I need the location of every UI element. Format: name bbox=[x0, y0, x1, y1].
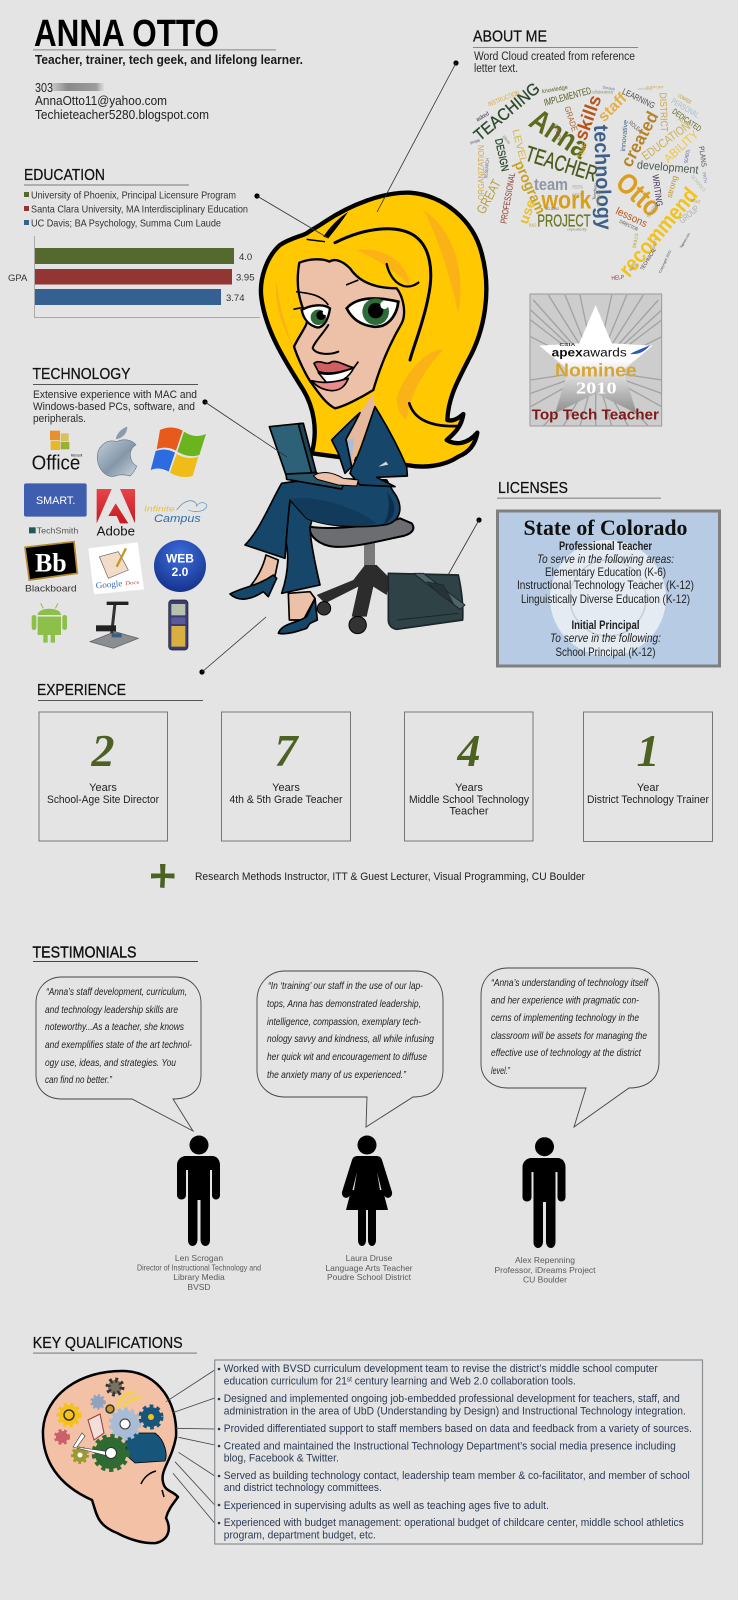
word cloud: PLANS bbox=[697, 146, 709, 168]
key qualifications heading: KEY QUALIFICATIONS bbox=[33, 1335, 183, 1352]
testimonials heading: TESTIMONIALS bbox=[32, 944, 136, 962]
experience card: 2 years: School-Age Site Director bbox=[47, 794, 159, 806]
qualification items: Experienced in supervising adults as well as teaching ages five to adult. bbox=[224, 1500, 549, 1512]
icon: blackboard: Blackboard bbox=[25, 584, 77, 594]
person icon: man bbox=[177, 1136, 220, 1246]
word cloud: TEACHER bbox=[523, 141, 601, 186]
quote 1: “Anna’s staff development, curriculum, bbox=[46, 986, 187, 998]
license card: Initial Principal bbox=[572, 618, 640, 632]
word cloud: ORGANIZATION bbox=[476, 145, 486, 200]
word cloud: people bbox=[470, 137, 481, 145]
word cloud: ALLY bbox=[676, 117, 692, 129]
word cloud: SCHOOL bbox=[683, 149, 692, 164]
education legend: University of Phoenix, Principal Licensure Program bbox=[31, 190, 236, 202]
experience card: 2 years: 2 bbox=[90, 725, 114, 776]
word cloud: repeatedly bbox=[567, 227, 587, 232]
quote 3: and her experience with pragmatic con- bbox=[491, 994, 639, 1006]
word cloud: Standards bbox=[602, 84, 615, 92]
word cloud: LEARNING bbox=[621, 86, 657, 111]
qualification items: program, department budget, etc. bbox=[224, 1530, 376, 1542]
speech bubble 3 bbox=[481, 968, 659, 1127]
panel: about me bbox=[470, 28, 709, 282]
qualification items: Worked with BVSD curriculum development team to revise the district’s middle school computer bbox=[224, 1363, 658, 1375]
face bbox=[294, 259, 404, 408]
icon: office: Microsoft bbox=[71, 454, 82, 458]
icon: techsmith: TechSmith bbox=[37, 526, 79, 536]
education legend: UC Davis; BA Psychology, Summa Cum Laude bbox=[31, 218, 221, 230]
word cloud: SCHOOLS bbox=[689, 174, 707, 194]
word cloud: DESIGN bbox=[492, 137, 511, 173]
word cloud: skills bbox=[570, 92, 605, 143]
word cloud: GRADE bbox=[562, 105, 580, 133]
icon: apple bbox=[97, 427, 137, 476]
qualification items: education curriculum for 21 bbox=[224, 1376, 356, 1388]
word cloud: team bbox=[534, 175, 568, 194]
word cloud: DISTRICT bbox=[657, 92, 669, 132]
word cloud: Teaching bbox=[592, 182, 598, 200]
icon: web 2.0 bbox=[154, 540, 206, 592]
quote 3: level.” bbox=[491, 1065, 510, 1077]
caption: Len Scrogan: BVSD bbox=[187, 1282, 211, 1292]
qualification items: Designed and implemented ongoing job-embedded professional development for teachers, staff, and bbox=[224, 1393, 680, 1405]
word cloud: PROJECT bbox=[537, 211, 591, 231]
word cloud: ROLE bbox=[627, 120, 640, 133]
connector line: about me bbox=[377, 60, 459, 212]
experience card: 7 years: 4th & 5th Grade Teacher bbox=[230, 794, 343, 806]
testimonial 3 bbox=[481, 968, 659, 1284]
word cloud: LEVEL bbox=[509, 128, 529, 165]
bar chart: GPA bbox=[8, 236, 260, 318]
caption: Alex Repenning: CU Boulder bbox=[523, 1274, 567, 1284]
qualification items: and district technology committees. bbox=[224, 1482, 382, 1494]
experience card: 7 years: 7 bbox=[274, 725, 300, 776]
qualification items: Served as building technology contact, leadership team member & co-facilitator, and member of school bbox=[224, 1470, 690, 1482]
license card: To serve in the following areas: bbox=[537, 552, 674, 566]
license card: Linguistically Diverse Education (K-12) bbox=[521, 592, 690, 606]
speech bubble 1 bbox=[36, 977, 201, 1131]
testimonial 2 bbox=[257, 971, 443, 1282]
qualification bullets bbox=[218, 1368, 220, 1524]
panel: about me: letter text. bbox=[474, 63, 518, 75]
word cloud: development bbox=[636, 158, 700, 177]
experience card: 2 years bbox=[39, 712, 168, 841]
character: cartoon teacher with laptop bbox=[230, 193, 486, 634]
qualification items: Provided differentiated support to staff members based on data and feedback from a variety of sources. bbox=[224, 1423, 692, 1435]
word cloud: SKILLS bbox=[632, 233, 639, 249]
word cloud: EDUCATION bbox=[639, 119, 693, 163]
quote 3: effective use of technology at the district bbox=[491, 1047, 642, 1059]
connector line: experience bbox=[199, 617, 266, 675]
eyes bbox=[293, 280, 398, 327]
caption: Laura Druse bbox=[325, 1253, 413, 1282]
word cloud: knowledge bbox=[542, 85, 569, 95]
word cloud: INSTRUCTION bbox=[487, 89, 521, 109]
icon: blackboard: Bb bbox=[35, 548, 67, 578]
icon: android bbox=[32, 603, 67, 643]
testimonial 1 bbox=[36, 977, 261, 1292]
caption: Len Scrogan: Library Media bbox=[173, 1272, 225, 1282]
technology logos bbox=[24, 427, 207, 650]
icon: office bbox=[32, 431, 82, 474]
quote 2: tops, Anna has demonstrated leadership, bbox=[267, 998, 421, 1010]
word cloud: use bbox=[515, 197, 539, 226]
contact details: AnnaOtto11@yahoo.com bbox=[35, 93, 167, 108]
caption: Alex Repenning: Alex Repenning bbox=[515, 1255, 575, 1265]
word cloud: innovative bbox=[620, 119, 630, 152]
quote 2 bbox=[267, 980, 434, 1081]
additional experience text: Research Methods Instructor, ITT & Guest Lecturer, Visual Programming, CU Boulder bbox=[195, 871, 585, 883]
word cloud: work bbox=[540, 186, 592, 214]
quote 2: nology savvy and kindness, all while infusing bbox=[267, 1033, 434, 1045]
experience card: 4 years: Middle School Technology bbox=[409, 794, 529, 806]
quote 1: ogy use, ideas, and strategies. You bbox=[45, 1057, 176, 1069]
word cloud: IMPLEMENTED bbox=[543, 86, 592, 109]
qualification items: century learning and Web 2.0 collaboration tools. bbox=[352, 1376, 576, 1388]
person icon: man bbox=[522, 1137, 566, 1248]
caption: Laura Druse: Poudre School District bbox=[327, 1272, 412, 1282]
experience card: 1 year: Year bbox=[637, 782, 659, 794]
contact details: Techieteacher5280.blogspot.com bbox=[35, 107, 209, 122]
technology heading: TECHNOLOGY bbox=[32, 366, 131, 383]
word cloud: BUILD bbox=[529, 223, 536, 228]
word cloud: BEST bbox=[572, 193, 582, 198]
quote 3: “Anna’s understanding of technology itself bbox=[491, 977, 649, 989]
legs bbox=[230, 479, 400, 634]
panel: licenses bbox=[497, 480, 720, 666]
experience card: 4 years: Years bbox=[455, 782, 483, 794]
icon: document camera bbox=[90, 602, 138, 648]
quote 2: intelligence, compassion, exemplary tech- bbox=[267, 1016, 421, 1028]
experience card: 4 years: Teacher bbox=[449, 806, 489, 818]
word cloud: HELP bbox=[611, 275, 624, 282]
experience card: 1 year: 1 bbox=[636, 725, 660, 776]
icon: web 2.0: 2.0 bbox=[172, 565, 189, 579]
quote 2: her quick wit and encouragement to diffuse bbox=[267, 1051, 427, 1063]
license card: Instructional Technology Teacher (K-12) bbox=[517, 578, 694, 592]
word cloud: STAFF bbox=[646, 202, 660, 219]
word cloud: ideas bbox=[502, 134, 512, 145]
panel: experience bbox=[37, 682, 712, 888]
badge: apex awards nominee: CSIA bbox=[559, 342, 577, 347]
mouth bbox=[312, 361, 358, 391]
icon: google docs bbox=[88, 542, 144, 594]
caption: Len Scrogan: Director of Instructional Technology and bbox=[137, 1262, 261, 1272]
panel: testimonials bbox=[32, 944, 659, 1292]
word cloud: CONFIDE bbox=[676, 93, 693, 106]
experience heading: EXPERIENCE bbox=[37, 682, 126, 699]
icon: office: Office bbox=[32, 451, 80, 474]
caption: Laura Druse: Laura Druse bbox=[346, 1253, 393, 1263]
quote 1: and technology leadership skills are bbox=[45, 1004, 178, 1016]
caption: Len Scrogan: Len Scrogan bbox=[175, 1253, 223, 1263]
panel: key qualifications bbox=[33, 1335, 702, 1544]
contact details: 303 bbox=[35, 80, 53, 95]
connector lines bbox=[166, 1370, 215, 1523]
briefcase bbox=[388, 573, 465, 629]
word cloud: strong bbox=[665, 175, 679, 199]
quote 2: the anxiety many of us experienced.” bbox=[267, 1069, 406, 1081]
qualifications box bbox=[215, 1360, 702, 1544]
license card: School Principal (K-12) bbox=[556, 645, 656, 659]
icon: graphing calculator bbox=[169, 600, 188, 650]
panel: technology: peripherals. bbox=[33, 413, 86, 425]
license card: Elementary Education (K-6) bbox=[545, 565, 666, 579]
word cloud: ROLE bbox=[690, 198, 701, 204]
technology text: Extensive experience with MAC and bbox=[33, 389, 197, 401]
word cloud: SUPPORT bbox=[646, 84, 665, 89]
hair bbox=[261, 193, 486, 467]
qualification items: Experienced with budget management: operational budget of childcare center, middle school athletics bbox=[224, 1517, 684, 1529]
icon: google docs: Docs bbox=[125, 580, 139, 587]
about me text: Word Cloud created from reference bbox=[474, 51, 635, 63]
jacket bbox=[332, 393, 407, 487]
icon: web 2.0: WEB bbox=[166, 552, 194, 566]
caption: Alex Repenning: Professor, iDreams Project bbox=[494, 1265, 596, 1275]
education legend: Santa Clara University, MA Interdisciplinary Education bbox=[31, 204, 248, 216]
head with gears illustration bbox=[43, 1371, 178, 1543]
word cloud: program bbox=[510, 158, 548, 217]
experience card: 2 years: Years bbox=[89, 782, 117, 794]
quote 3 bbox=[491, 977, 649, 1077]
word cloud: STUDIES bbox=[552, 124, 562, 141]
qualification items bbox=[224, 1363, 692, 1542]
badge: apex awards nominee: Top Tech Teacher bbox=[532, 407, 659, 423]
quote 3: classroom will be assets for managing the bbox=[491, 1030, 647, 1042]
word cloud bbox=[470, 79, 709, 282]
word cloud: PEERS bbox=[572, 184, 583, 189]
word cloud: WRITING bbox=[650, 174, 665, 207]
icon: windows bbox=[151, 428, 206, 477]
experience card: 7 years: Years bbox=[272, 782, 300, 794]
bar chart: GPA: 3.74 bbox=[226, 293, 244, 304]
icon: infinite campus: Campus bbox=[154, 513, 201, 525]
contact details bbox=[35, 80, 209, 122]
word cloud: community bbox=[637, 86, 652, 91]
about me heading: ABOUT ME bbox=[473, 28, 547, 46]
caption: Len Scrogan bbox=[137, 1253, 261, 1292]
qualification items: Created and maintained the Instructional Technology Department’s social media presence including bbox=[224, 1440, 676, 1452]
word cloud: PERSONAL bbox=[670, 97, 701, 120]
qualification items: blog, Facebook & Twitter. bbox=[224, 1452, 339, 1464]
quote 2: “In ‘training’ our staff in the use of our lap- bbox=[268, 980, 423, 992]
education heading: EDUCATION bbox=[24, 167, 105, 184]
word cloud: DIRECTOR bbox=[618, 219, 639, 233]
quote 1: can find no better.” bbox=[45, 1074, 112, 1086]
word cloud: GREAT bbox=[473, 177, 504, 216]
chair bbox=[310, 518, 413, 634]
word cloud: lessons bbox=[614, 205, 649, 230]
badge: apex awards nominee: Nominee bbox=[555, 360, 637, 381]
caption: Alex Repenning bbox=[494, 1255, 596, 1284]
word cloud: PATH bbox=[701, 172, 708, 183]
bar chart: GPA: 3.95 bbox=[236, 272, 254, 284]
experience card: 4 years bbox=[404, 712, 533, 841]
word cloud: ABILITY bbox=[661, 127, 701, 166]
title: ANNA OTTO bbox=[34, 13, 219, 55]
icon: infinite campus: Infinite bbox=[144, 505, 175, 514]
license title: State of Colorado bbox=[524, 515, 688, 540]
speech bubble 2 bbox=[257, 971, 443, 1127]
experience card: 4 years: 4 bbox=[456, 725, 480, 776]
word cloud: PROFESSIONAL bbox=[498, 172, 517, 224]
experience card: 1 year bbox=[584, 712, 712, 842]
person icon: woman bbox=[342, 1136, 392, 1246]
icon: plus bbox=[151, 864, 174, 888]
experience card: 7 years bbox=[222, 712, 350, 841]
qualification items: st bbox=[347, 1376, 352, 1384]
connector line: education bbox=[254, 193, 328, 238]
word cloud: resources bbox=[595, 190, 601, 207]
badge: apex awards nominee bbox=[530, 294, 662, 426]
icon: google docs: Google bbox=[95, 578, 123, 590]
quote 1: and exemplifies state of the art technol- bbox=[45, 1039, 192, 1051]
panel: technology: Windows-based PCs, software, and bbox=[33, 401, 195, 413]
icon: infinite campus bbox=[144, 501, 207, 525]
panel: education bbox=[8, 167, 260, 318]
icon: adobe: Adobe bbox=[97, 524, 135, 538]
word cloud: created bbox=[617, 108, 662, 170]
licenses heading: LICENSES bbox=[498, 480, 568, 497]
word cloud: TIME bbox=[576, 141, 589, 160]
word cloud: Anna bbox=[524, 102, 596, 166]
word cloud: QUALITY bbox=[650, 238, 658, 252]
nose bbox=[313, 325, 338, 354]
qualification items: administration in the area of UbD (Understanding by Design) and Instructional Technology integration. bbox=[224, 1406, 686, 1418]
badge: apex awards nominee: 2010 bbox=[576, 378, 617, 397]
word cloud: TEACHING bbox=[470, 79, 544, 145]
word cloud: DEDICATED bbox=[671, 107, 703, 134]
word cloud: staff bbox=[595, 89, 631, 125]
quote 1: noteworthy...As a teacher, she knows bbox=[45, 1021, 185, 1033]
connector line: licenses bbox=[448, 517, 482, 575]
education legend bbox=[24, 190, 248, 230]
quote 1 bbox=[45, 986, 192, 1086]
license card: To serve in the following: bbox=[550, 631, 661, 645]
caption: Laura Druse: Language Arts Teacher bbox=[325, 1263, 413, 1273]
word cloud: Otto bbox=[609, 166, 668, 224]
icon: adobe bbox=[97, 489, 135, 538]
license details: Professional Teacher bbox=[559, 539, 652, 553]
word cloud: asked bbox=[475, 111, 490, 123]
word cloud: Tagxedo.com bbox=[679, 232, 691, 249]
word cloud: technology bbox=[589, 124, 616, 231]
header: name and contact bbox=[33, 13, 303, 122]
word cloud: TECHNICAL bbox=[640, 247, 658, 272]
panel: technology bbox=[24, 366, 207, 650]
word cloud: Working bbox=[628, 262, 638, 272]
word cloud: GROUP bbox=[677, 203, 701, 226]
bar chart: GPA: 4.0 bbox=[239, 252, 252, 263]
quote 3: cerns of implementing technology in the bbox=[491, 1012, 639, 1024]
experience card: 1 year: District Technology Trainer bbox=[587, 794, 709, 806]
icon: blackboard bbox=[25, 542, 77, 594]
bar chart: GPA: GPA bbox=[8, 273, 28, 284]
word cloud: recommend bbox=[614, 182, 702, 282]
word cloud: RESEARCH bbox=[483, 158, 490, 178]
license card bbox=[498, 511, 720, 666]
tagline: Teacher, trainer, tech geek, and lifelong learner. bbox=[35, 53, 303, 67]
word cloud: INCLUDING bbox=[545, 206, 559, 211]
word cloud: collaboratively bbox=[592, 89, 614, 94]
connector line: technology bbox=[202, 399, 287, 457]
word cloud: Copyright 2011 bbox=[658, 249, 672, 274]
icon: smart: SMART. bbox=[36, 495, 75, 507]
icon: smart bbox=[24, 483, 87, 517]
laptop bbox=[269, 423, 358, 489]
badge: apex awards nominee: apexawards bbox=[552, 346, 627, 360]
